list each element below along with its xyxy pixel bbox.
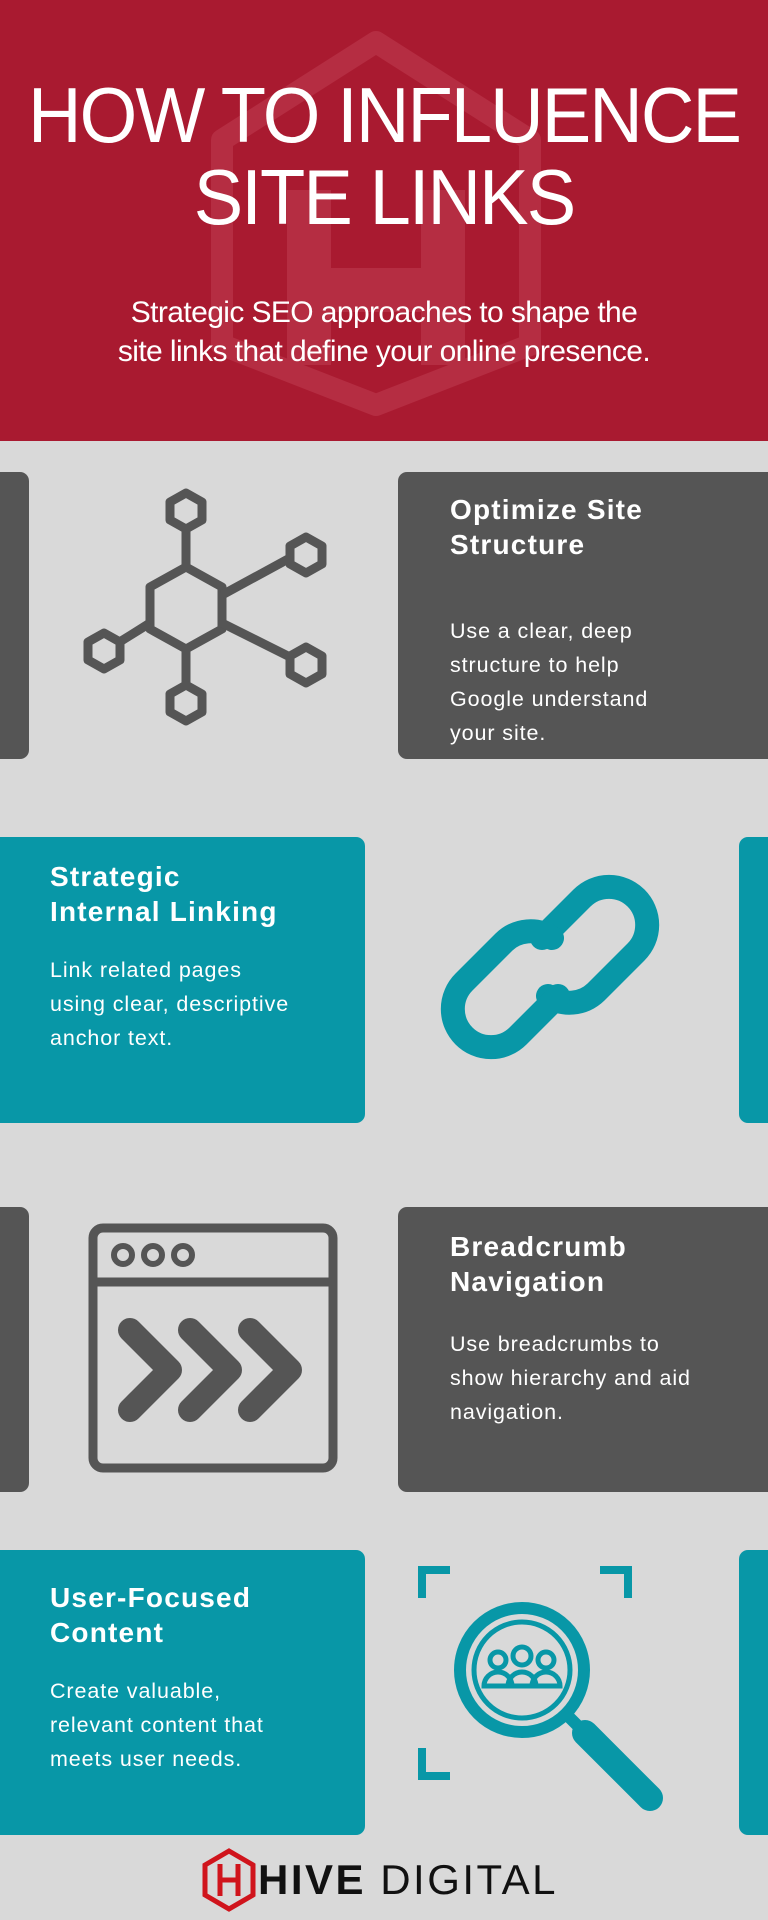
- text: Link related pages: [50, 958, 242, 982]
- text: Use a clear, deep: [450, 619, 633, 643]
- icon: magnifier with users: [418, 1566, 663, 1811]
- panel: optimize site structure: [398, 472, 768, 759]
- text: anchor text.: [50, 1026, 173, 1050]
- subtitle: [118, 296, 650, 368]
- side bar row1: [0, 472, 29, 759]
- text: Use breadcrumbs to: [450, 1332, 660, 1356]
- text: show hierarchy and aid: [450, 1366, 691, 1390]
- side bar row4: [739, 1550, 768, 1835]
- heading: Navigation: [450, 1266, 605, 1297]
- text: using clear, descriptive: [50, 992, 289, 1016]
- heading: [50, 1582, 251, 1648]
- heading: Breadcrumb: [450, 1231, 627, 1262]
- header: [0, 0, 768, 441]
- heading: Content: [50, 1617, 164, 1648]
- watermark hexagon logo: [211, 31, 541, 416]
- text: navigation.: [450, 1400, 564, 1424]
- text: relevant content that: [50, 1713, 264, 1737]
- icon: browser window with chevrons: [88, 1224, 338, 1472]
- title: [28, 71, 740, 241]
- icon: hex logo: [202, 1848, 256, 1912]
- text: Google understand: [450, 687, 648, 711]
- text: meets user needs.: [50, 1747, 242, 1771]
- heading: Internal Linking: [50, 896, 278, 927]
- heading: [450, 1231, 627, 1297]
- text: [450, 619, 648, 745]
- logo: hive digital: [202, 1848, 558, 1912]
- heading: Optimize Site: [450, 494, 643, 525]
- title: SITE LINKS: [194, 153, 574, 241]
- subtitle: site links that define your online presence.: [118, 335, 650, 368]
- side bar row3: [0, 1207, 29, 1492]
- icon: network hexagons: [84, 488, 326, 726]
- panel: breadcrumb navigation: [398, 1207, 768, 1492]
- text: your site.: [450, 721, 546, 745]
- text: Create valuable,: [50, 1679, 221, 1703]
- heading: Strategic: [50, 861, 181, 892]
- heading: User-Focused: [50, 1582, 251, 1613]
- panel: strategic internal linking: [0, 837, 365, 1123]
- text: structure to help: [450, 653, 619, 677]
- heading: [50, 861, 278, 927]
- logo text: HIVE DIGITAL: [258, 1856, 558, 1903]
- side bar row2: [739, 837, 768, 1123]
- text: [50, 1679, 264, 1771]
- panel: user-focused content: [0, 1550, 365, 1835]
- title: HOW TO INFLUENCE: [28, 71, 740, 159]
- text: [50, 958, 289, 1050]
- heading: [450, 494, 643, 560]
- text: [450, 1332, 691, 1424]
- icon: chain link: [440, 874, 660, 1060]
- subtitle: Strategic SEO approaches to shape the: [131, 296, 637, 329]
- heading: Structure: [450, 529, 585, 560]
